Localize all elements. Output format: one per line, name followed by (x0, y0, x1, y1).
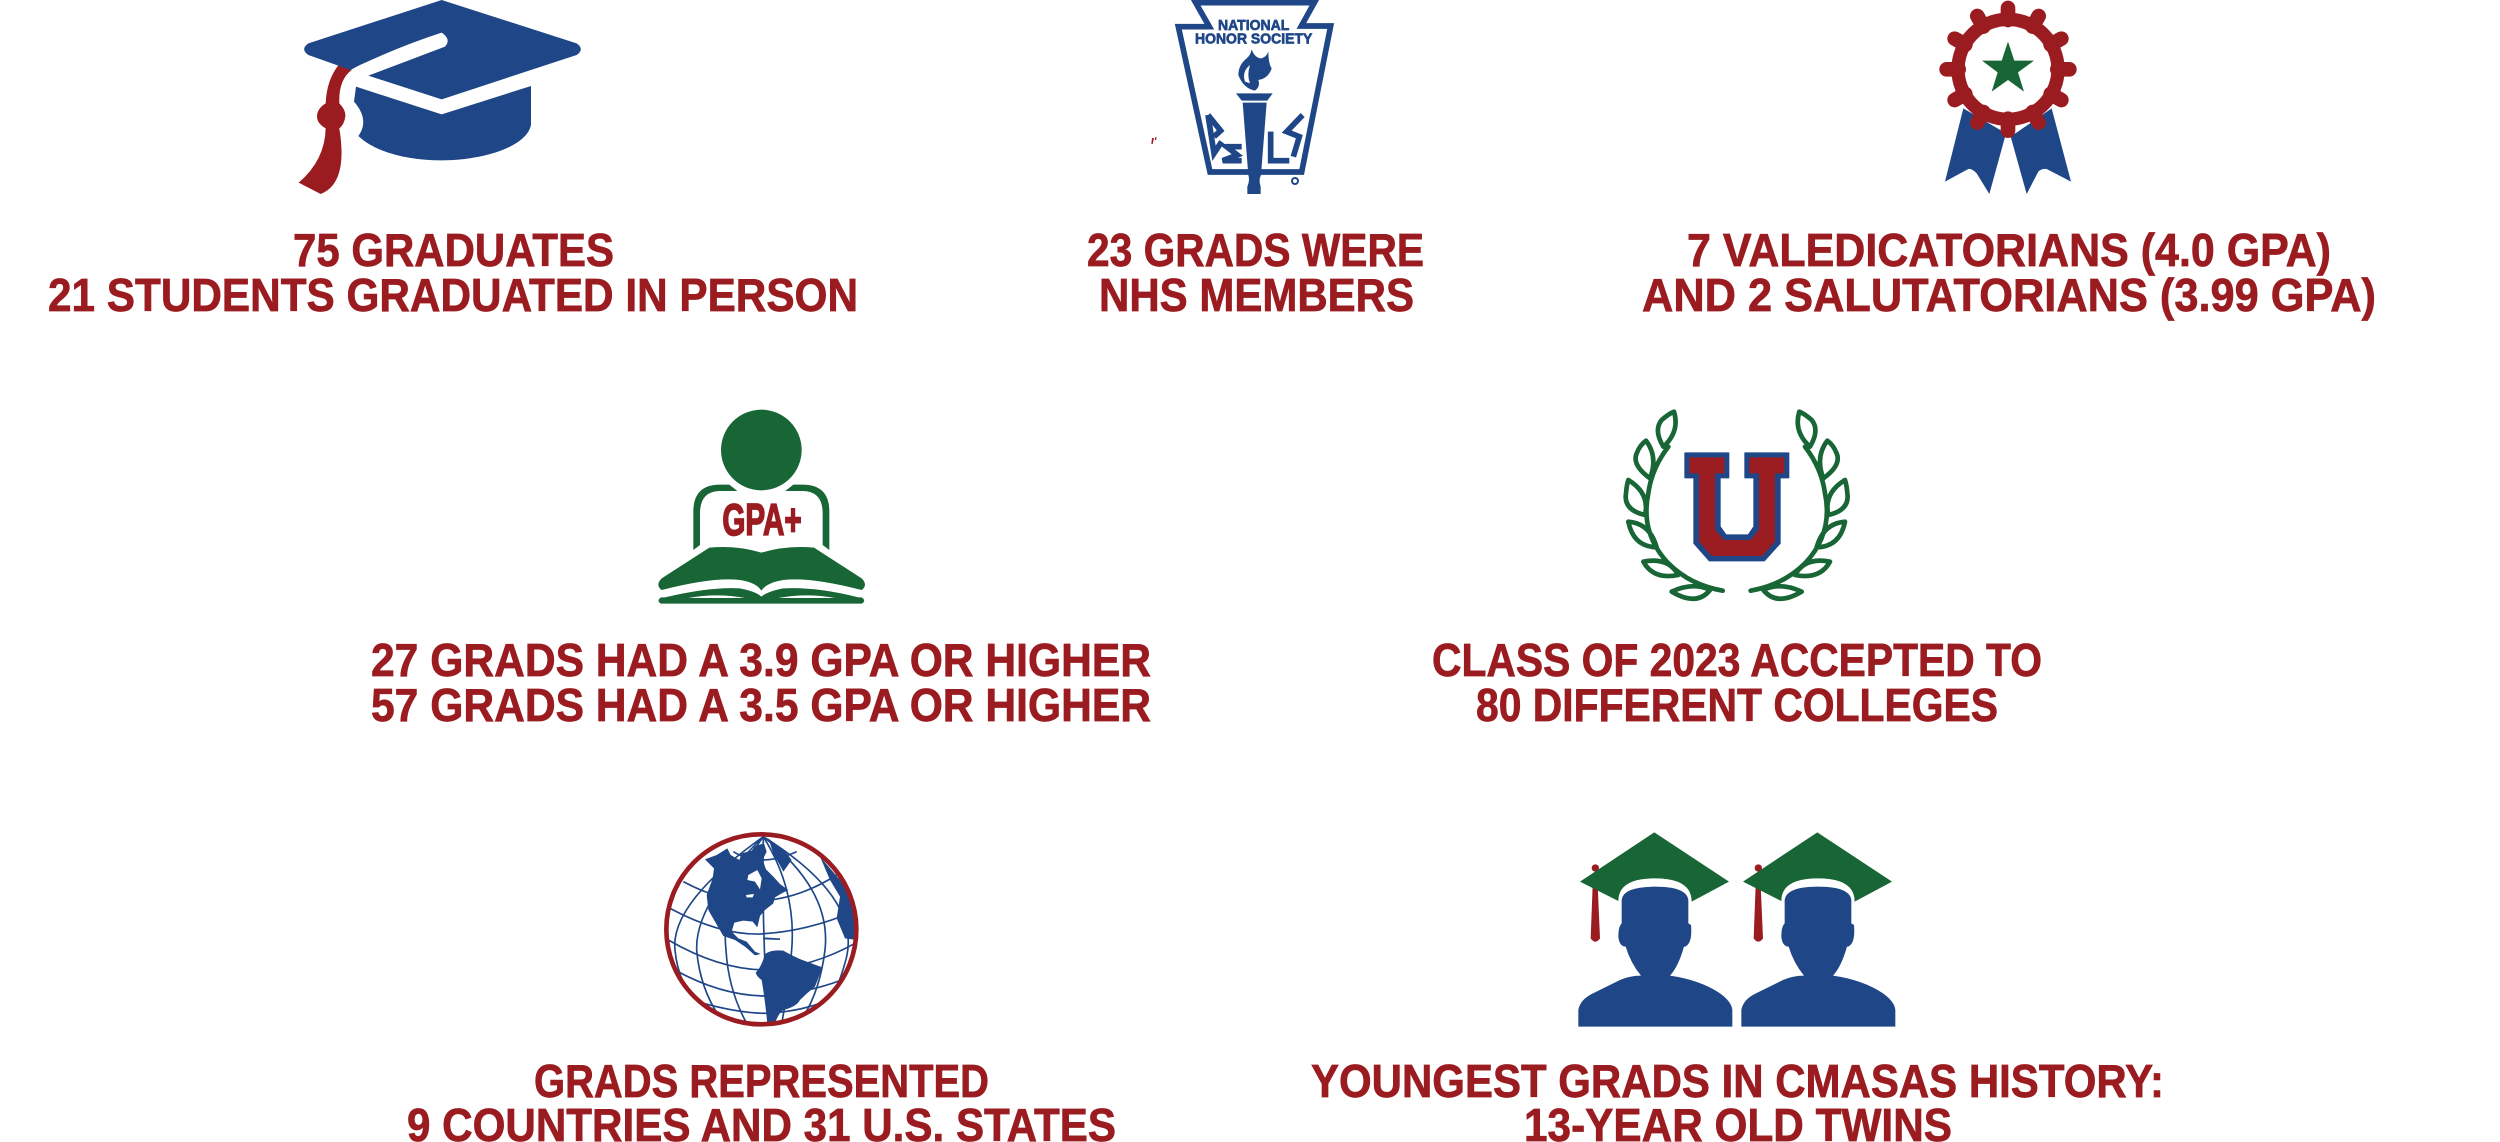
text: NHS members (1087, 224, 1424, 321)
panel: GPA (371, 410, 1151, 731)
text: GPA counts (371, 634, 1151, 731)
text: colleges accepted: CLASS OF 2023 ACCEPTED TO (1432, 634, 2042, 686)
icon: NHS keystone emblem: HONOR SOCIETY (1195, 31, 1313, 47)
text: valedictorians and salutatorians: AND 2 SALUTATORIANS (3.99 GPA) (1642, 269, 2376, 321)
text: colleges accepted (1432, 634, 2042, 731)
icon: student reading book with GPA+ (658, 410, 865, 604)
text: youngest graduates (1311, 1055, 2164, 1142)
icon: award ribbon with star (1945, 8, 2071, 194)
icon: first twin (1578, 832, 1732, 1027)
text: colleges accepted: 80 DIFFERENT COLLEGES (1476, 679, 1998, 731)
panel: valedictorians (1642, 8, 2376, 321)
text: NHS members: NHS MEMBERS (1099, 269, 1414, 321)
icon: university U in laurel wreath (1626, 412, 1848, 599)
text: countries and states (407, 1055, 1116, 1142)
text: youngest graduates: YOUNGEST GRADS IN CMASAS HISTORY: (1311, 1055, 2164, 1107)
text: valedictorians and salutatorians (1642, 224, 2376, 321)
panel: youngest grads (1311, 832, 2164, 1142)
text: graduates count: 21 STUDENTS GRADUATED IN PERSON (48, 269, 858, 321)
icon: graduation cap (299, 0, 581, 194)
text: GPA counts: 57 GRADS HAD A 3.5 GPA OR HIGHER (371, 679, 1151, 731)
icon: NHS keystone emblem (1151, 3, 1331, 194)
icon: globe (666, 834, 857, 1024)
text: GPA counts: 27 GRADS HAD A 3.9 GPA OR HIGHER (371, 634, 1151, 686)
panel: colleges (1432, 412, 2042, 731)
text: graduates count: 75 GRADUATES (293, 224, 614, 276)
panel: graduates (48, 0, 858, 321)
panel: national honor society (1087, 3, 1424, 321)
panel: countries and states (407, 834, 1116, 1142)
text: graduates count (48, 224, 858, 321)
text: valedictorians and salutatorians: 7 VALEDICATORIANS (4.0 GPA) (1687, 224, 2331, 276)
text: countries and states: GRADS REPRESENTED (534, 1055, 989, 1107)
text: NHS members: 23 GRADS WERE (1087, 224, 1424, 276)
icon: student reading book with GPA+: GPA+ (722, 496, 802, 545)
icon: second twin (1741, 832, 1895, 1027)
icon: NHS keystone emblem: NATIONAL (1218, 18, 1289, 34)
icon: twin graduates (1578, 832, 1895, 1027)
